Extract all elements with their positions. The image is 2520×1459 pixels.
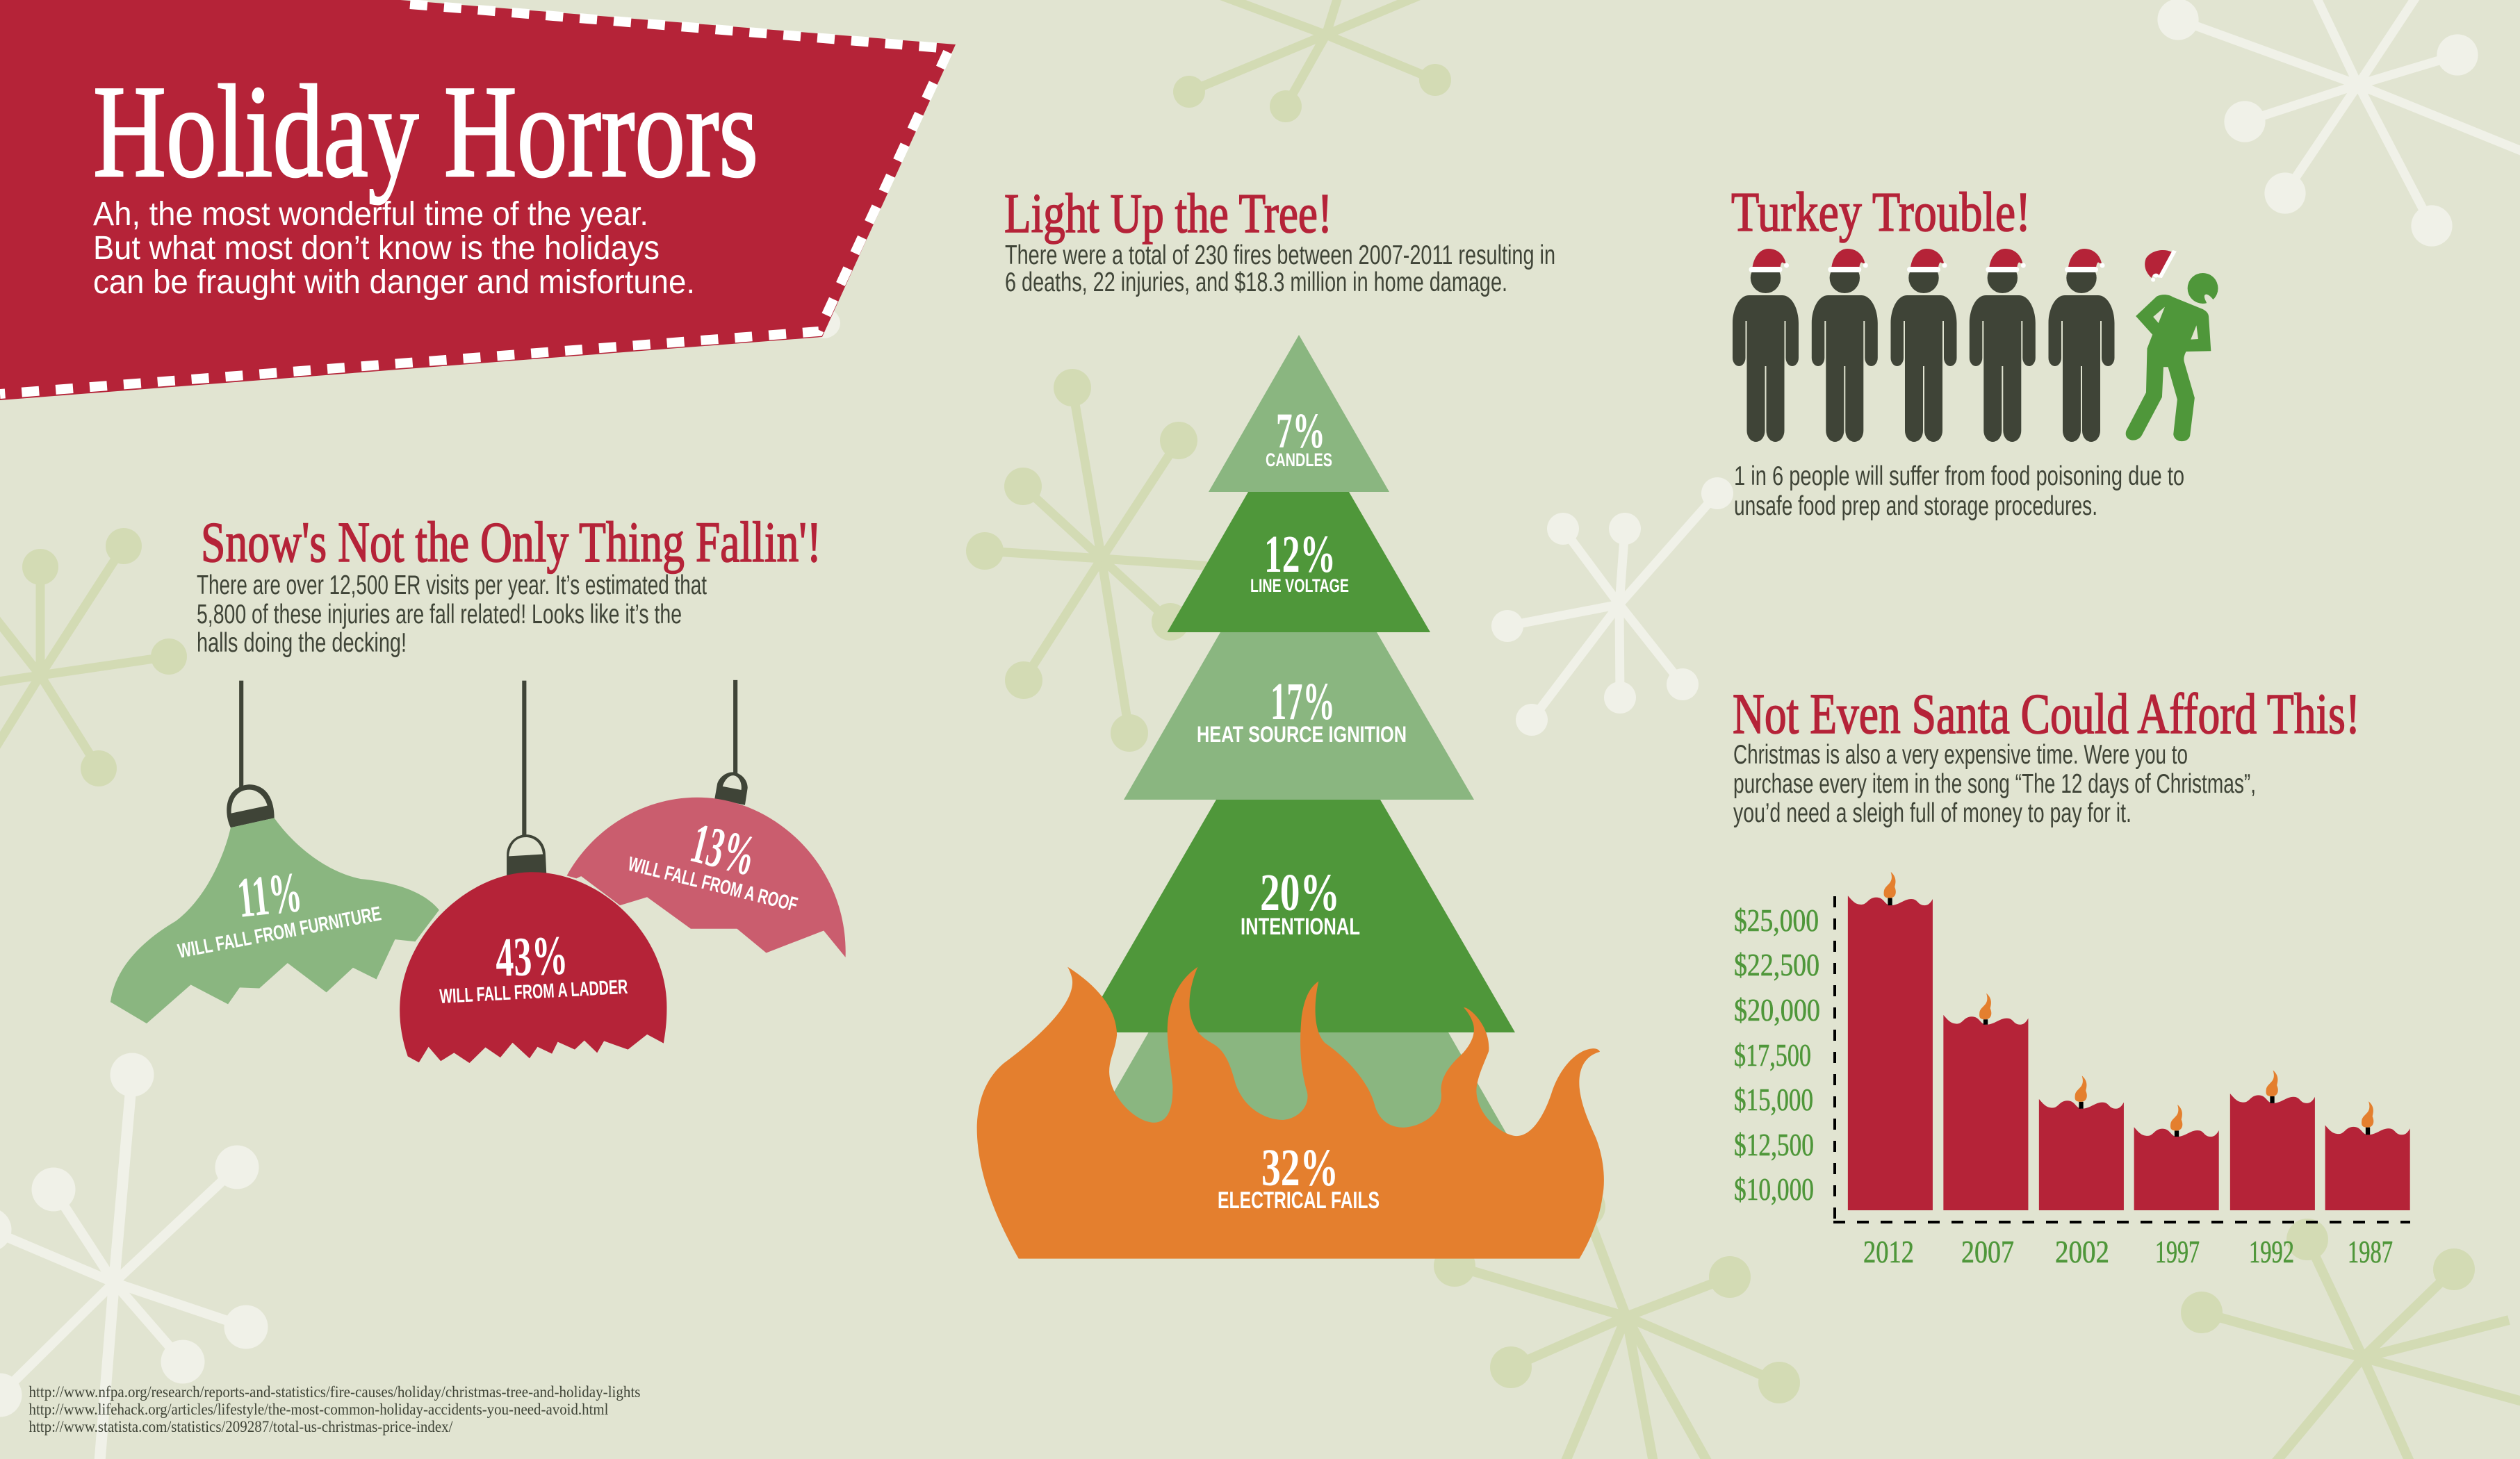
text: tree intro: There were a total of 230 fires between 2007-2011 resulting in — [1005, 240, 1555, 270]
sick person — [2126, 250, 2218, 441]
intro text: Ah, the most wonderful time of the year. — [93, 196, 648, 233]
sources — [29, 1383, 641, 1435]
ornament: roof (pink): WILL FALL FROM A ROOF — [625, 853, 800, 916]
candle bars — [1848, 872, 2410, 1210]
ornament: ladder (red): WILL FALL FROM A LADDER — [439, 976, 628, 1008]
banner shape — [0, 0, 956, 400]
title: Holiday Horrors — [93, 59, 758, 205]
person 3 — [1890, 249, 1957, 442]
tier labels: HEAT SOURCE IGNITION — [1197, 722, 1407, 747]
pictogram row — [1733, 249, 2218, 442]
x axis labels: 1987 — [2348, 1235, 2393, 1269]
candle bar chart — [1734, 872, 2410, 1269]
banner stitched edge — [0, 4, 949, 394]
ornament: furniture (green): 11% — [234, 860, 304, 930]
sources: http://www.nfpa.org/research/reports-and-statistics/fire-causes/holiday/christmas-tree-and-holiday-lights — [29, 1383, 641, 1401]
y axis labels: $25,000 — [1734, 903, 1819, 938]
text: falls intro: 5,800 of these injuries are fall related! Looks like it’s the — [197, 600, 682, 629]
tier: candles — [1209, 335, 1389, 492]
intro text: can be fraught with danger and misfortune. — [93, 264, 695, 301]
bar: 2012 — [1848, 872, 1933, 1210]
person 2 — [1812, 249, 1878, 442]
text: tree intro — [1005, 240, 1555, 297]
intro text — [93, 196, 695, 301]
text: food poisoning: 1 in 6 people will suffer from food poisoning due to — [1734, 461, 2184, 491]
snowflake: centre right — [1491, 477, 1733, 736]
bar: 1992 — [2230, 1070, 2315, 1210]
tier labels: ELECTRICAL FAILS — [1218, 1187, 1380, 1214]
bar: 2007 — [1943, 994, 2028, 1210]
heading: tree: Light Up the Tree! — [1004, 183, 1332, 245]
tier: electrical fails base — [1079, 1032, 1518, 1153]
heading: falls: Snow's Not the Only Thing Fallin'! — [201, 510, 821, 574]
x axis labels — [1863, 1235, 2393, 1269]
snowflake: top centre — [1173, 0, 1451, 122]
snowflake: bottom centre — [1434, 1186, 1800, 1459]
chart axes — [1833, 896, 2410, 1223]
panel: falls — [111, 510, 846, 1063]
panel: santa cost — [1733, 682, 2410, 1269]
text: food poisoning — [1734, 461, 2184, 521]
bar: 1997 — [2134, 1105, 2219, 1210]
tier: heat source — [1124, 632, 1474, 800]
snowflake: bottom right — [2181, 1219, 2520, 1459]
tier labels: 12% — [1264, 525, 1336, 584]
person 5 — [2049, 249, 2114, 442]
y axis labels: $15,000 — [1734, 1082, 1813, 1117]
text: tree intro: 6 deaths, 22 injuries, and $18.3 million in home damage. — [1005, 267, 1507, 297]
x axis labels: 2012 — [1863, 1235, 1914, 1269]
tier: intentional — [1081, 800, 1515, 1032]
ornament: ladder (red) — [400, 681, 666, 1063]
person 4 — [1970, 249, 2036, 442]
snowflake: centre left — [966, 369, 1213, 752]
banner — [0, 0, 956, 400]
y axis labels: $10,000 — [1734, 1172, 1814, 1207]
tier labels: 20% — [1260, 864, 1340, 922]
sources: http://www.statista.com/statistics/209287/total-us-christmas-price-index/ — [29, 1418, 453, 1435]
ornament: roof (pink) — [567, 680, 846, 957]
person 1 — [1733, 249, 1799, 442]
text: falls intro: There are over 12,500 ER visits per year. It’s estimated that — [197, 570, 707, 600]
tier labels: 7% — [1276, 403, 1325, 459]
ornament: furniture (green) — [111, 681, 439, 1023]
panel: turkey — [1731, 182, 2218, 521]
text: santa intro: you’d need a sleigh full of money to pay for it. — [1733, 798, 2132, 828]
y axis labels: $12,500 — [1734, 1128, 1814, 1162]
tier labels: 17% — [1270, 673, 1335, 731]
y axis labels — [1734, 903, 1820, 1207]
snowflake knob behind banner — [807, 308, 840, 338]
text: santa intro — [1733, 740, 2256, 828]
ornament: ladder (red): 43% — [495, 925, 569, 989]
x axis labels: 2007 — [1961, 1235, 2014, 1269]
text: santa intro: purchase every item in the song “The 12 days of Christmas”, — [1733, 769, 2256, 799]
heading: turkey: Turkey Trouble! — [1731, 182, 2031, 243]
ornament: roof (pink): 13% — [685, 811, 762, 888]
x axis labels: 1992 — [2249, 1235, 2294, 1269]
y axis labels: $22,500 — [1734, 948, 1819, 982]
text: falls intro: halls doing the decking! — [197, 628, 407, 658]
tier labels: LINE VOLTAGE — [1250, 575, 1349, 596]
snowflake: top right — [2157, 0, 2520, 247]
snowflake: bottom left — [0, 1053, 268, 1459]
text: food poisoning: unsafe food prep and storage procedures. — [1734, 491, 2097, 521]
bar: 1987 — [2325, 1101, 2410, 1210]
snowflake: left — [0, 528, 187, 786]
tier labels: CANDLES — [1266, 450, 1332, 470]
panel: tree fires — [977, 183, 1604, 1259]
y axis labels: $20,000 — [1734, 993, 1820, 1028]
y axis labels: $17,500 — [1734, 1038, 1811, 1073]
tier labels — [1197, 403, 1407, 1214]
bar: 2002 — [2039, 1075, 2124, 1210]
ornament: furniture (green): WILL FALL FROM FURNITURE — [176, 902, 383, 963]
text: santa intro: Christmas is also a very expensive time. Were you to — [1733, 740, 2188, 770]
sources: http://www.lifehack.org/articles/lifestyle/the-most-common-holiday-accidents-you-need-avoid.html — [29, 1401, 609, 1418]
text: falls intro — [197, 570, 707, 658]
tree chart — [977, 335, 1604, 1259]
tier labels: INTENTIONAL — [1241, 914, 1360, 940]
tier: line voltage — [1168, 492, 1430, 632]
tier labels: 32% — [1261, 1139, 1339, 1197]
x axis labels: 2002 — [2055, 1235, 2109, 1269]
x axis labels: 1997 — [2155, 1235, 2200, 1269]
flames — [977, 967, 1604, 1259]
ornaments — [111, 680, 846, 1063]
intro text: But what most don’t know is the holidays — [93, 230, 660, 267]
